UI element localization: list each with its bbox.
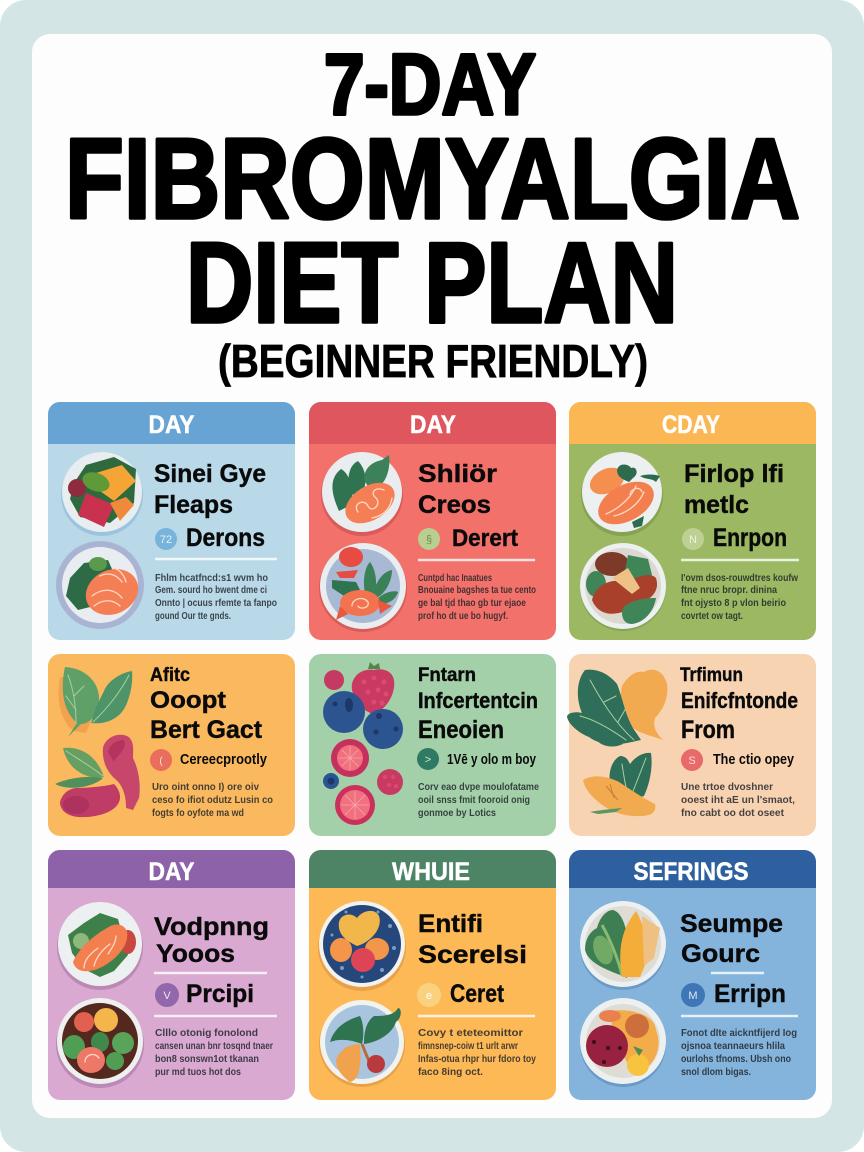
subheading: Ceret [450,980,505,1008]
icon: leafy vegetable plate [319,1000,405,1087]
badge [681,983,705,1007]
description: ojsnoa teannaeurs hlila [681,1040,785,1052]
description: Cuntpd hac Inaatues [418,572,492,584]
panel: card 9 blue: SEFRINGS [634,858,748,886]
panel: card 4 orange [48,654,295,836]
description [155,572,277,622]
panel: card 1 blue: DAY [148,411,195,439]
meal title line three: From [681,716,735,744]
description: Gem. sourd ho bwent dme ci [155,584,267,596]
description: I'ovm dsos-rouwdtres koufw [681,572,799,584]
description: fogts fo oyfote ma wd [152,807,244,819]
description: Bnouaine bagshes ta tue cento [418,584,536,596]
description: cansen unan bnr tosqnd tnaer [155,1040,273,1052]
badge: S [688,755,696,767]
description: bon8 sonswn1ot tkanan [155,1053,259,1065]
panel: card 2 red [309,402,556,640]
description [418,572,536,622]
badge: ( [159,756,163,767]
description: fno cabt oo dot oseet [681,807,784,819]
panel: card 5 mint [309,654,556,836]
panel: card 8 amber: WHUIE [392,858,470,886]
icon: mixed vegetable plate [61,452,143,536]
description: Une trtoe dvoshner [681,781,773,793]
badge: 72 [160,534,172,546]
subheading: Erripn [714,980,786,1008]
subheading: Derons [186,524,265,552]
description: ge bal tjd thao gb tur ejaoe [418,597,526,609]
description: Fhlm hcatfncd:s1 wvm ho [155,572,268,584]
icon: mixed stew bowl [56,998,144,1088]
title: DIET PLAN [186,220,678,347]
icon: leaves and red beans [55,667,140,817]
description: Clllo otonig fonolond [155,1027,258,1039]
subheading: The ctio opey [713,752,794,768]
meal title: Shliör [418,460,497,488]
description [681,1027,797,1078]
panel: card 2 red: DAY [410,411,456,439]
description: prof ho dt ue bo hugyf. [418,610,508,622]
description [152,781,273,819]
badge [681,749,703,771]
description: pur md tuos hot dos [155,1066,241,1078]
description: Corv eao dvpe moulofatame [418,781,539,793]
panel: card 7 purple [48,850,295,1100]
icon: leafy salmon bowl [319,543,407,632]
description: ceso fo ifiot odutz Lusin co [152,794,273,806]
meal title line two: Creos [418,491,491,519]
meal title: Vodpnng [154,913,269,941]
subheading: Enrpon [713,524,787,552]
description: gound Our tte gnds. [155,610,231,622]
description: Uro oint onno I) ore oiv [152,781,259,793]
meal title line two: Infcertentcin [418,688,538,713]
title [65,37,800,347]
meal title line two: Gourc [681,940,760,968]
subheading: Cereecprootly [180,752,267,768]
icon: beet and squash plate [580,998,666,1087]
description: fnt ojysto 8 p vlon beirio [681,597,786,609]
title: 7-DAY [324,37,536,133]
description: covrtet ow tagt. [681,610,743,622]
icon: salmon and greens plate [56,541,146,629]
description: faco 8ing oct. [418,1066,483,1078]
badge: V [163,990,171,1002]
meal title line two: Scerelsi [418,941,527,969]
subheading: Prcipi [186,980,254,1008]
subtitle: (BEGINNER FRIENDLY) [218,335,648,387]
panel: card 3 green [569,402,816,640]
description: ourlohs tfnoms. Ubsh ono [681,1053,791,1065]
badge [418,528,440,550]
badge [682,528,704,550]
meal title line two: metlc [684,491,749,519]
subheading: 1Vē y olo m boy [447,752,536,768]
description: snol dlom bigas. [681,1066,751,1078]
panel: card 6 peach [567,654,816,836]
description: Onnto | ocuus rfemte ta fanpo [155,597,277,609]
meal title: Entifi [418,910,483,938]
meal title: Fntarn [418,665,476,686]
badge: N [689,534,697,546]
meal title: Sinei Gye [154,460,266,488]
description [418,781,539,819]
meal title: Afitc [150,665,190,686]
description [155,1027,273,1078]
description: Covy t eteteomittor [418,1027,523,1039]
badge [417,983,441,1007]
meal title: Trfimun [680,665,743,686]
badge: e [426,990,432,1002]
description [418,1027,536,1078]
panel: card 9 blue [569,850,816,1100]
panel: card 7 purple: DAY [148,858,195,886]
icon: fruit on navy plate [318,901,406,991]
description [681,781,795,819]
subheading: Derert [452,525,518,552]
badge [150,749,172,771]
description: ftne nruc bropr. dinina [681,584,777,596]
meal title: Firlop lfi [684,460,784,488]
icon: salmon salad plate [57,902,143,990]
meal title line two: Enifcfntonde [681,688,798,713]
description: ooil snss fmit fooroid onig [418,794,530,806]
icon: salmon plate [581,452,663,536]
badge [155,983,179,1007]
icon: salmon with leaves plate [321,452,403,536]
description: fimnsnep-coiw t1 urlt arwr [418,1040,518,1052]
badge [417,748,439,770]
icon: berries [323,662,403,825]
panel: card 3 green: CDAY [662,411,720,439]
meal title line two: Ooopt [150,687,226,714]
panel: card 8 amber [309,850,556,1100]
icon: leaves and squash [567,670,667,816]
badge: > [425,754,431,766]
badge: M [688,990,698,1002]
badge: § [426,534,432,546]
meal title line two: Fleaps [154,491,233,519]
badge [155,528,177,550]
description: Infas-otua rhpr hur fdoro toy [418,1053,536,1065]
meal title line two: Yooos [156,940,235,968]
description: gonmoe by Lotics [418,807,496,819]
description: Fonot dIte aickntfijerd Iog [681,1027,797,1039]
description [681,572,799,622]
icon: beef and greens plate [580,543,666,631]
description: ooest iht aE un l'smaot, [681,794,795,806]
meal title line three: Eneoien [418,716,504,744]
panel: card 1 blue [48,402,295,640]
meal title: Seumpe [680,910,783,938]
meal title line three: Bert Gact [150,716,263,744]
icon: greens and squash plate [580,901,666,990]
